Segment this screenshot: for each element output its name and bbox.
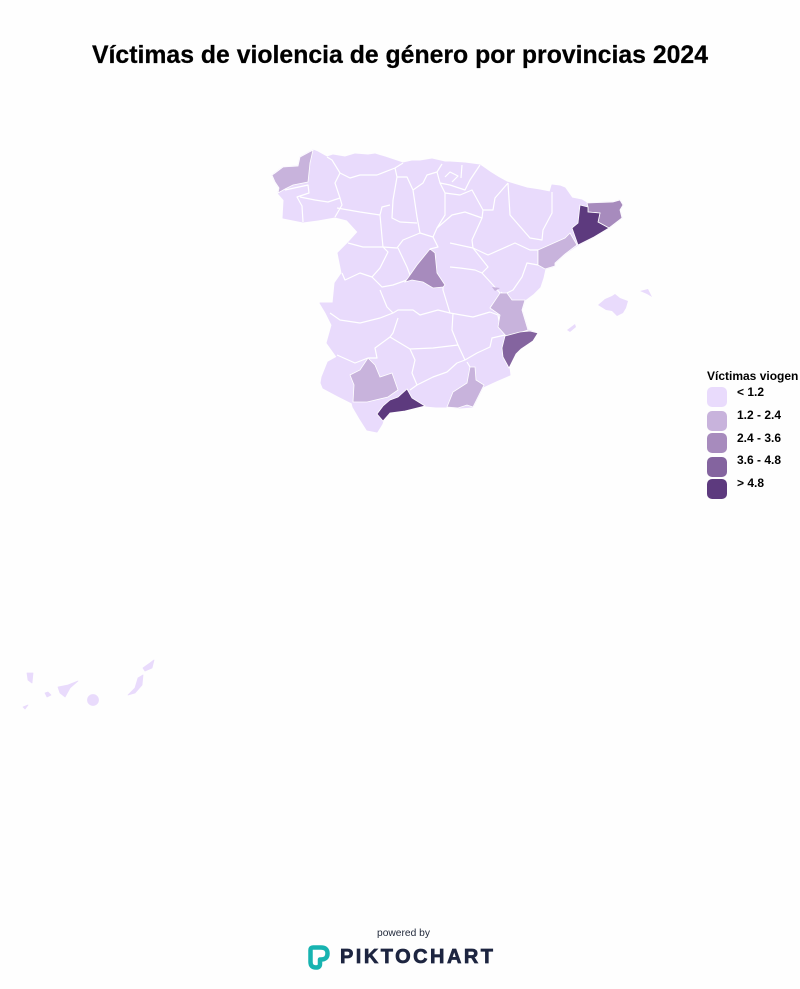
legend item: 1.2 to 2.4: 1.2 - 2.4 [737,408,781,422]
province: Almería (1.2-2.4) [447,367,484,408]
legend [707,369,798,499]
Canary Islands [23,660,154,709]
legend item: 3.6 to 4.8: 3.6 - 4.8 [737,453,781,467]
province: Girona (2.4-3.6) [587,200,623,228]
Piktochart wordmark: PIKTOCHART [340,946,493,968]
icon: Piktochart logo [310,948,328,968]
province: A Coruña (1.2-2.4) [272,150,313,193]
footer: powered by Piktochart [310,928,493,968]
Balearic Islands [567,289,652,332]
powered by text: powered by [377,928,430,939]
base silhouette: provinces under 1.2 [272,150,623,432]
province: Valencia (1.2-2.4) [490,293,528,337]
title: Víctimas de violencia de género por provincias 2024 [92,41,708,69]
province: Barcelona (over 4.8) [572,205,609,245]
legend title: Víctimas viogen [707,369,798,383]
province: Rincón de Ademuz (1.2-2.4) [492,287,500,291]
province: Tarragona (1.2-2.4) [538,233,577,269]
province borders [285,157,552,390]
choropleth map: peninsula [272,150,623,432]
legend item: over 4.8: > 4.8 [737,476,764,490]
legend item: 2.4 to 3.6: 2.4 - 3.6 [737,431,781,445]
province: Madrid (2.4-3.6) [405,249,445,288]
province: Sevilla (1.2-2.4) [350,358,398,402]
legend item: under 1.2: < 1.2 [737,385,764,399]
province: Málaga (over 4.8) [377,389,425,421]
province: Alicante (3.6-4.8) [502,331,538,368]
